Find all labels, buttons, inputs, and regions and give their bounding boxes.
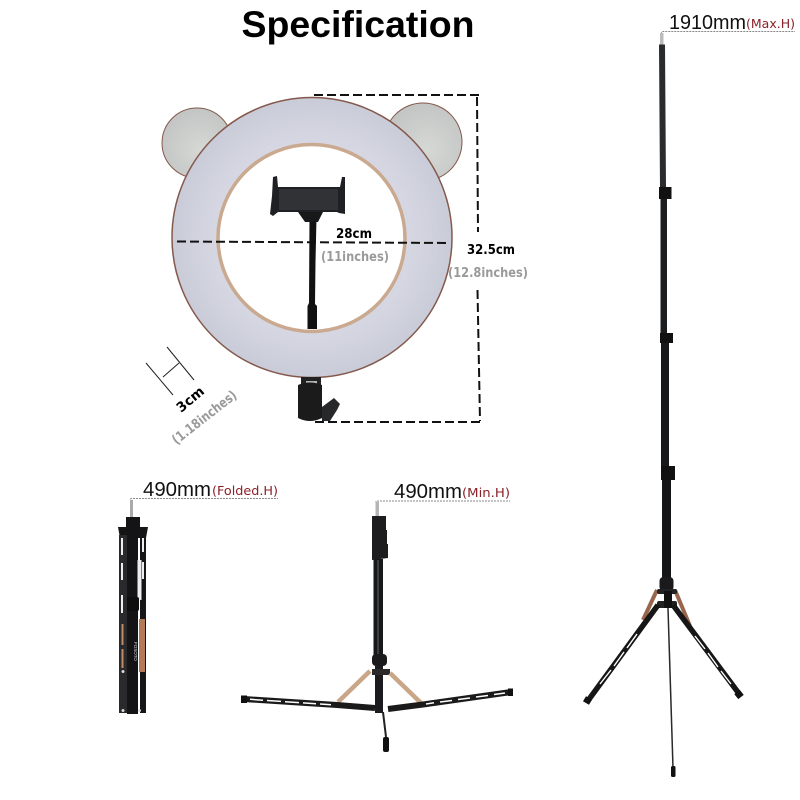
lower hub — [657, 601, 677, 608]
centre leg — [668, 608, 673, 768]
centre foot — [671, 766, 676, 777]
hub centre — [664, 591, 672, 608]
spigot — [376, 502, 379, 516]
lock one — [659, 187, 672, 199]
label: 1.18 inches: (1.18inches) — [169, 387, 240, 448]
spigot — [130, 500, 133, 517]
ring light — [162, 98, 462, 378]
tube highlight — [377, 560, 379, 654]
holder plate — [279, 189, 338, 210]
lower tube — [375, 666, 383, 713]
copper strip — [139, 619, 145, 672]
qualifier: (Folded.H) — [212, 483, 278, 498]
leader line — [376, 501, 510, 503]
collar — [660, 577, 674, 591]
collar — [372, 654, 387, 666]
value: 490mm — [143, 479, 211, 501]
spigot — [660, 33, 664, 45]
max stand label — [661, 12, 795, 34]
flanges — [118, 527, 148, 538]
top section — [659, 44, 666, 188]
qualifier: (Min.H) — [462, 485, 510, 500]
leader line — [661, 32, 795, 34]
folded stand — [118, 500, 148, 714]
rivets — [122, 670, 141, 712]
brand text: FOSOTO — [133, 642, 138, 661]
left brace — [643, 590, 657, 620]
centre foot — [383, 737, 389, 752]
dashed lower vertical — [478, 290, 480, 421]
icon: right ear — [384, 103, 462, 181]
right leg — [140, 535, 146, 713]
bottom section — [662, 480, 671, 580]
ring inner band — [218, 144, 405, 332]
label: 3cm: 3cm — [173, 384, 208, 416]
gooseneck arm — [308, 218, 317, 329]
top cap — [126, 517, 140, 528]
leader line — [130, 498, 278, 500]
right leg slots — [426, 693, 505, 704]
left leg slots — [250, 699, 331, 705]
silver collar — [306, 381, 317, 385]
right brace — [675, 590, 690, 626]
right leg — [673, 605, 740, 695]
label: 12.8 inches: (12.8inches) — [448, 265, 528, 281]
cylinder body — [298, 382, 322, 421]
width bracket — [146, 347, 194, 395]
dashed upper vertical — [477, 97, 478, 232]
right leg foot — [508, 688, 513, 696]
height dimension — [314, 95, 528, 422]
phone holder — [270, 176, 345, 329]
left brace — [338, 671, 370, 702]
right brace — [390, 673, 421, 703]
lock two — [660, 333, 673, 343]
leg slots — [121, 538, 144, 613]
title: Specification — [242, 3, 474, 45]
left leg foot — [241, 696, 247, 703]
max height stand — [586, 33, 741, 777]
diameter dimension — [177, 226, 449, 265]
value: 1910mm — [669, 12, 746, 34]
left leg — [244, 699, 375, 708]
value: 490mm — [394, 481, 462, 503]
dashed top line — [314, 94, 483, 96]
min height stand — [241, 502, 513, 752]
centre leg — [383, 712, 386, 737]
lock three — [661, 466, 675, 480]
left leg — [587, 605, 658, 702]
ball neck — [301, 377, 321, 386]
label: 32.5cm: 32.5cm — [467, 242, 515, 258]
folded stand label — [130, 479, 278, 501]
dashed bottom line — [315, 421, 484, 423]
centre tube — [127, 520, 138, 714]
copper slots — [122, 624, 124, 668]
width dimension — [146, 347, 240, 448]
right leg — [388, 692, 511, 709]
label: 28cm: 28cm — [336, 226, 372, 242]
lock clamps — [372, 516, 388, 560]
left leg slots — [600, 634, 637, 684]
holder clamp — [270, 176, 345, 216]
min stand label — [376, 481, 510, 503]
label: 11 inches: (11inches) — [321, 249, 389, 265]
upper tube — [374, 559, 383, 656]
lock knob — [322, 398, 340, 421]
third section — [661, 342, 669, 468]
dashed horizontal 28cm line — [177, 242, 449, 243]
holder joint — [298, 212, 323, 222]
right foot — [737, 692, 741, 697]
ball head mount — [298, 377, 340, 421]
second section — [660, 198, 667, 334]
left leg — [119, 535, 127, 713]
hub — [657, 589, 677, 594]
qualifier: (Max.H) — [746, 16, 795, 31]
hub — [372, 669, 390, 675]
collar — [127, 597, 139, 611]
icon: left ear — [162, 108, 232, 178]
left foot — [586, 698, 589, 703]
ring face — [172, 98, 452, 378]
right leg slots — [695, 636, 731, 684]
